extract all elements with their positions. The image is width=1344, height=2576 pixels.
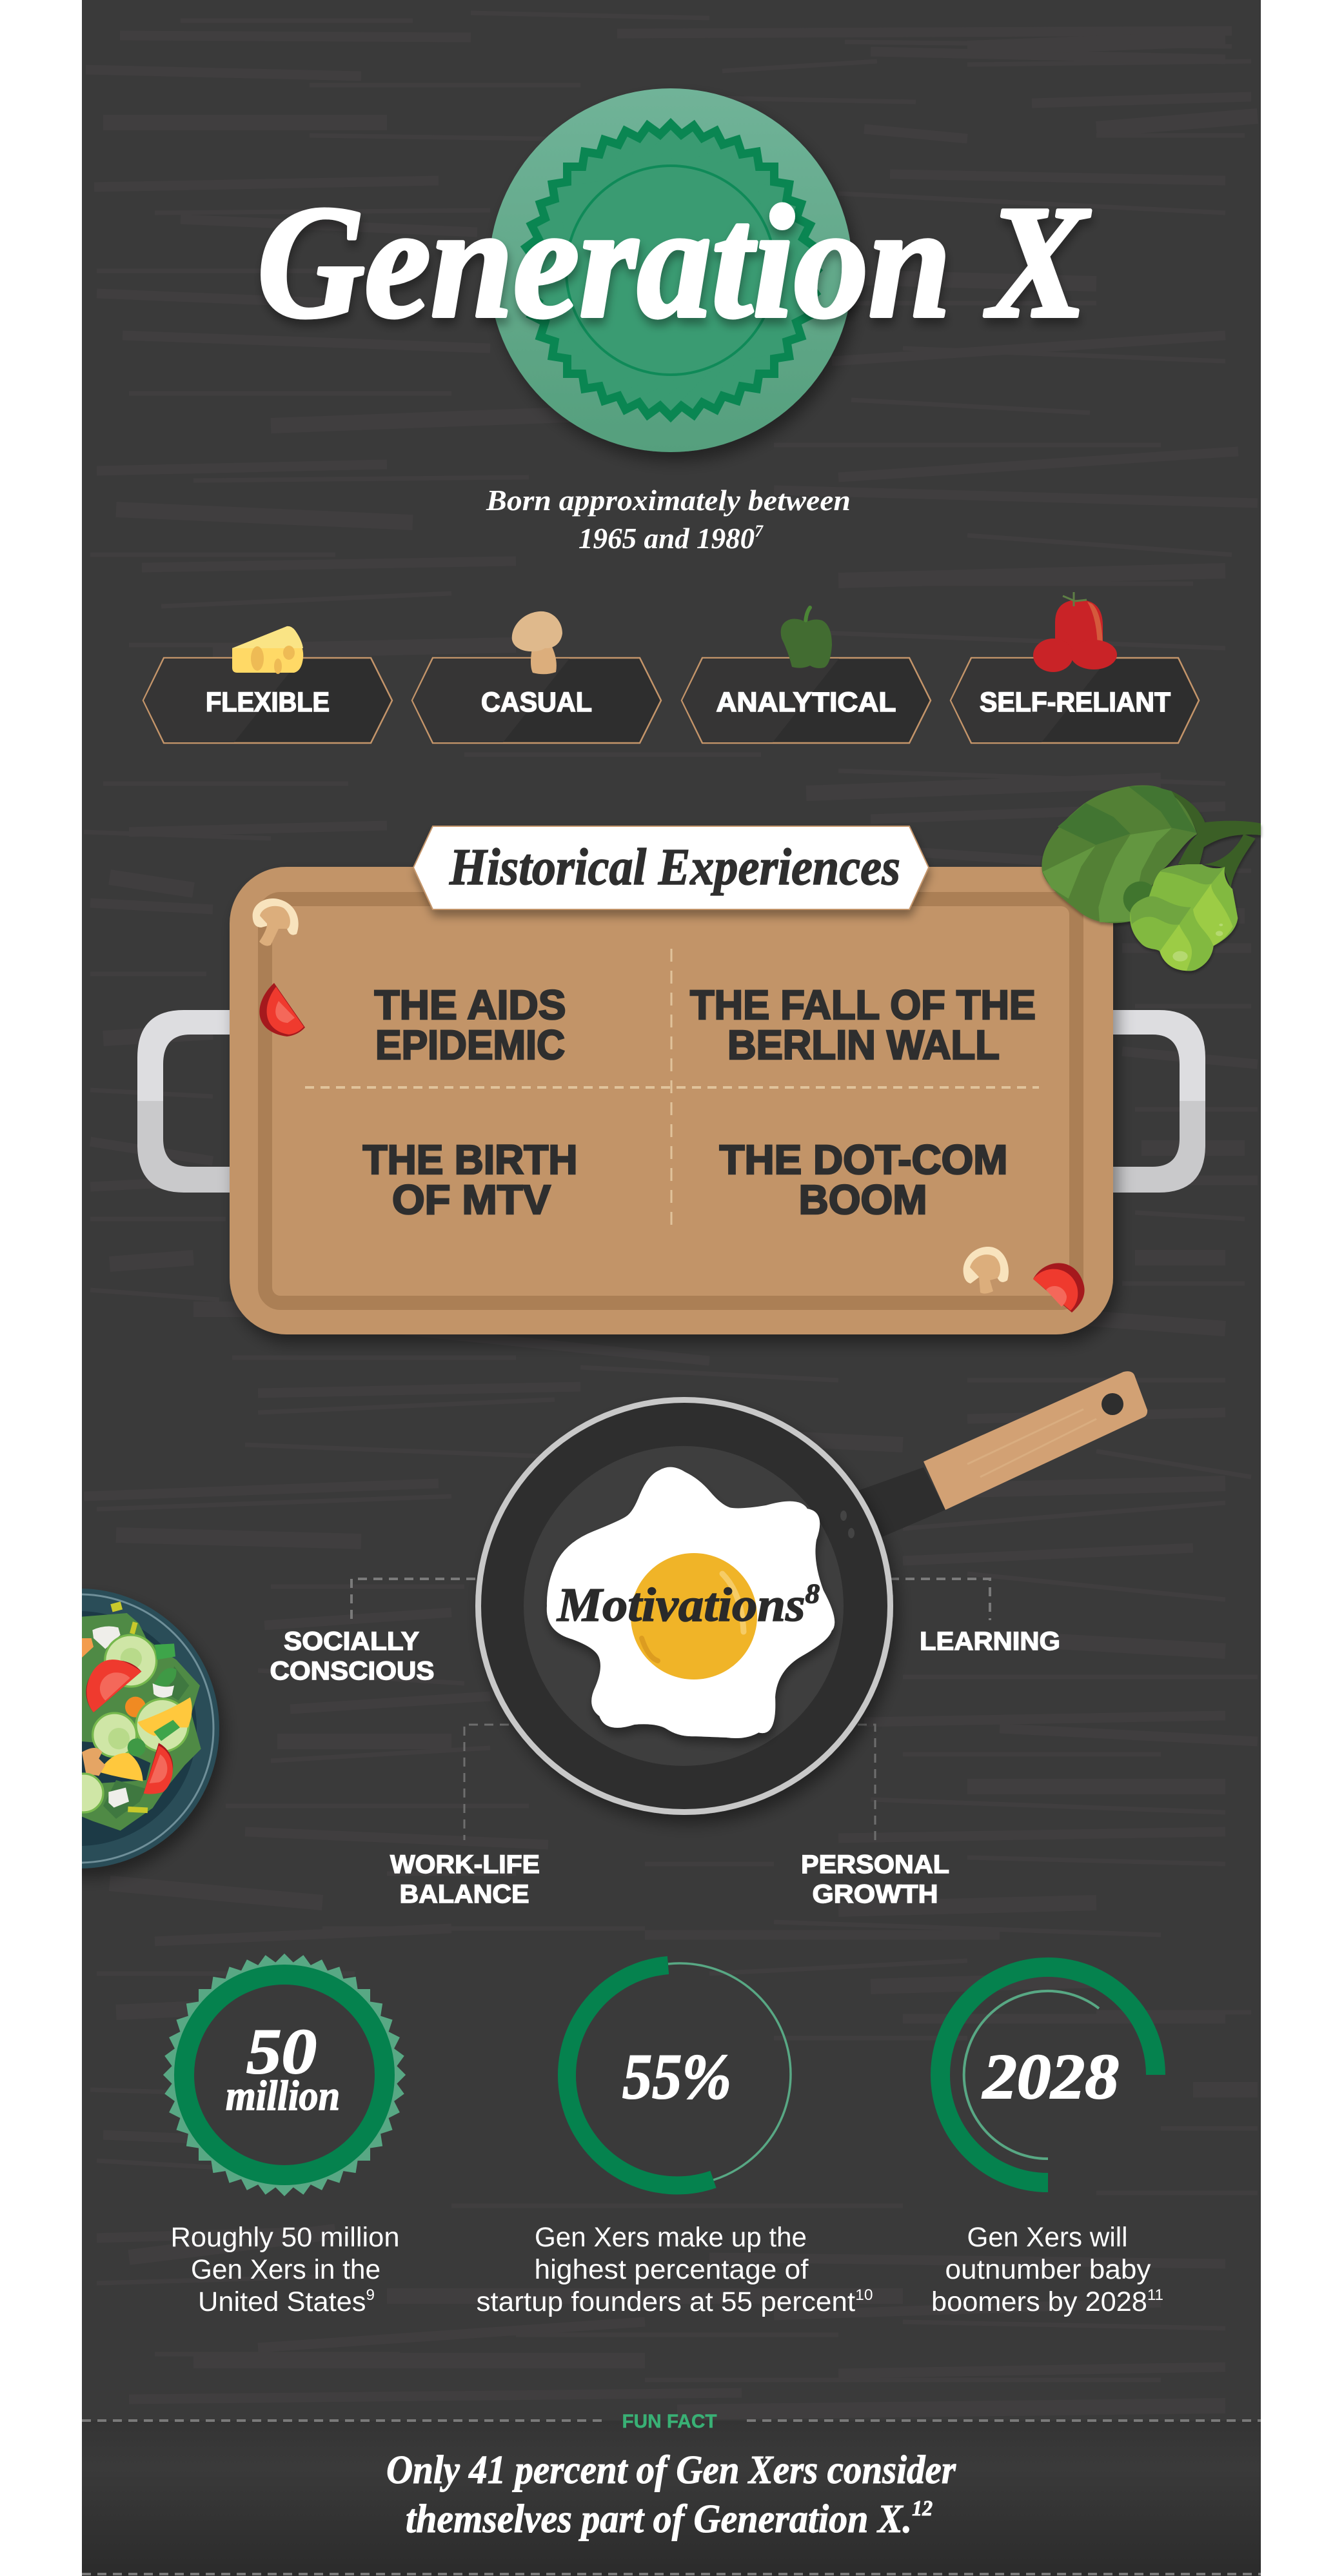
subtitle [486, 484, 851, 555]
stat: 2028 [940, 1967, 1156, 2183]
label: personal growth: PERSONAL [801, 1850, 949, 1879]
icon: green pepper [781, 608, 832, 668]
text: aids epidemic: THE AIDS [374, 982, 566, 1028]
text: aids epidemic [374, 982, 566, 1068]
stat: 50 million [163, 1954, 406, 2196]
title: Generation X [257, 173, 1091, 352]
stat text: 2028: Gen Xers will [967, 2222, 1127, 2253]
frying pan with egg [475, 1397, 893, 1815]
label: self-reliant: SELF-RELIANT [980, 687, 1171, 718]
subtitle: 1965 and 1980 [578, 522, 758, 555]
text: berlin wall: BERLIN WALL [727, 1022, 1000, 1068]
panel: historical experiences cutting board [137, 826, 1205, 1334]
icon: tomato slice right [1033, 1263, 1085, 1313]
label: socially conscious: SOCIALLY [284, 1627, 419, 1656]
stat text: 55 percent: 10 [855, 2286, 873, 2304]
icon: tomato slice left [259, 983, 305, 1036]
text: fun fact: Only 41 percent of Gen Xers consider [386, 2448, 956, 2492]
board [230, 867, 1113, 1334]
stat text: 2028: outnumber baby [945, 2254, 1151, 2285]
icon: salad plate [82, 1589, 227, 1879]
stat text: 50 million [170, 2222, 400, 2317]
connector: learning [890, 1579, 990, 1620]
stat: 55 percent: 55% [622, 2041, 731, 2112]
icon: mushroom [512, 611, 562, 674]
label: flexible: FLEXIBLE [206, 687, 330, 718]
icon: leaves [1042, 786, 1261, 971]
stat text: 55 percent: Gen Xers make up the [535, 2222, 807, 2253]
stat text: 2028: boomers by 2028 [931, 2286, 1145, 2317]
text: birth of mtv [362, 1136, 578, 1223]
trait: casual [412, 611, 661, 743]
handle: left [137, 1010, 230, 1193]
label: learning: LEARNING [920, 1627, 1060, 1656]
stat text: 55 percent: highest percentage of [534, 2254, 809, 2285]
label: casual: CASUAL [481, 687, 592, 718]
label: personal growth: GROWTH [813, 1880, 938, 1908]
stat text: 50 million: United States [198, 2286, 364, 2317]
stat text: 55 percent [476, 2222, 873, 2317]
stat: 50 million: 50 [246, 2016, 317, 2087]
icon: egg [549, 1469, 833, 1736]
trait: analytical [682, 608, 931, 743]
stat text: 55 percent: startup founders at 55 percent [476, 2286, 846, 2317]
subtitle: 7 [755, 522, 764, 540]
connector: work-life balance [464, 1725, 509, 1840]
label: socially conscious [270, 1627, 435, 1685]
icon: cheese [232, 626, 303, 674]
icon: frying pan handle [856, 1371, 1147, 1538]
dashed dividers [671, 949, 672, 1231]
handle: right [1113, 1010, 1205, 1193]
text: fun fact: themselves part of Generation X. [406, 2497, 947, 2541]
label: work-life balance [390, 1850, 540, 1908]
heading: fun fact: FUN FACT [622, 2411, 717, 2432]
trait: self-reliant [951, 592, 1199, 743]
trait: flexible [143, 626, 392, 743]
badge: title sunburst circle [489, 88, 853, 452]
stat: 50 million: million [226, 2072, 340, 2119]
label: personal growth [801, 1850, 949, 1908]
label: analytical: ANALYTICAL [716, 687, 896, 718]
text: berlin wall [690, 982, 1036, 1068]
text: birth of mtv: OF MTV [392, 1176, 551, 1223]
label: socially conscious: CONSCIOUS [270, 1657, 435, 1685]
heading: motivations: 8 [805, 1580, 820, 1609]
connector: socially conscious [351, 1579, 475, 1620]
icon: mushroom bottom right [964, 1247, 1009, 1294]
stat: 2028: 2028 [982, 2041, 1119, 2112]
text: dot-com boom [720, 1136, 1007, 1223]
label: work-life balance: WORK-LIFE [390, 1850, 540, 1879]
connector: personal growth [858, 1725, 875, 1840]
heading: motivations: Motivations [557, 1579, 791, 1632]
text: birth of mtv: THE BIRTH [362, 1136, 578, 1183]
text: aids epidemic: EPIDEMIC [375, 1022, 565, 1068]
heading: historical experiences [413, 826, 929, 909]
stat text: 50 million: 9 [366, 2286, 375, 2304]
stat text: 50 million: Gen Xers in the [191, 2254, 380, 2285]
heading: historical experiences: Historical Experiences [449, 839, 900, 896]
stat text: 2028 [931, 2222, 1163, 2317]
stat text: 2028: 11 [1147, 2286, 1163, 2304]
text: dot-com boom: BOOM [798, 1176, 927, 1223]
text: dot-com boom: THE DOT-COM [720, 1136, 1007, 1183]
stat text: 50 million: Roughly 50 million [170, 2222, 400, 2253]
text: fun fact [386, 2448, 956, 2541]
icon: tomatoes [1033, 592, 1117, 672]
text: berlin wall: THE FALL OF THE [690, 982, 1036, 1028]
subtitle: Born approximately between [486, 484, 851, 517]
text: fun fact: 12 [912, 2497, 933, 2521]
label: work-life balance: BALANCE [400, 1880, 529, 1908]
stat: 55 percent [567, 1963, 791, 2185]
icon: mushroom top left [253, 898, 299, 946]
panel: fun fact [82, 2411, 1261, 2576]
